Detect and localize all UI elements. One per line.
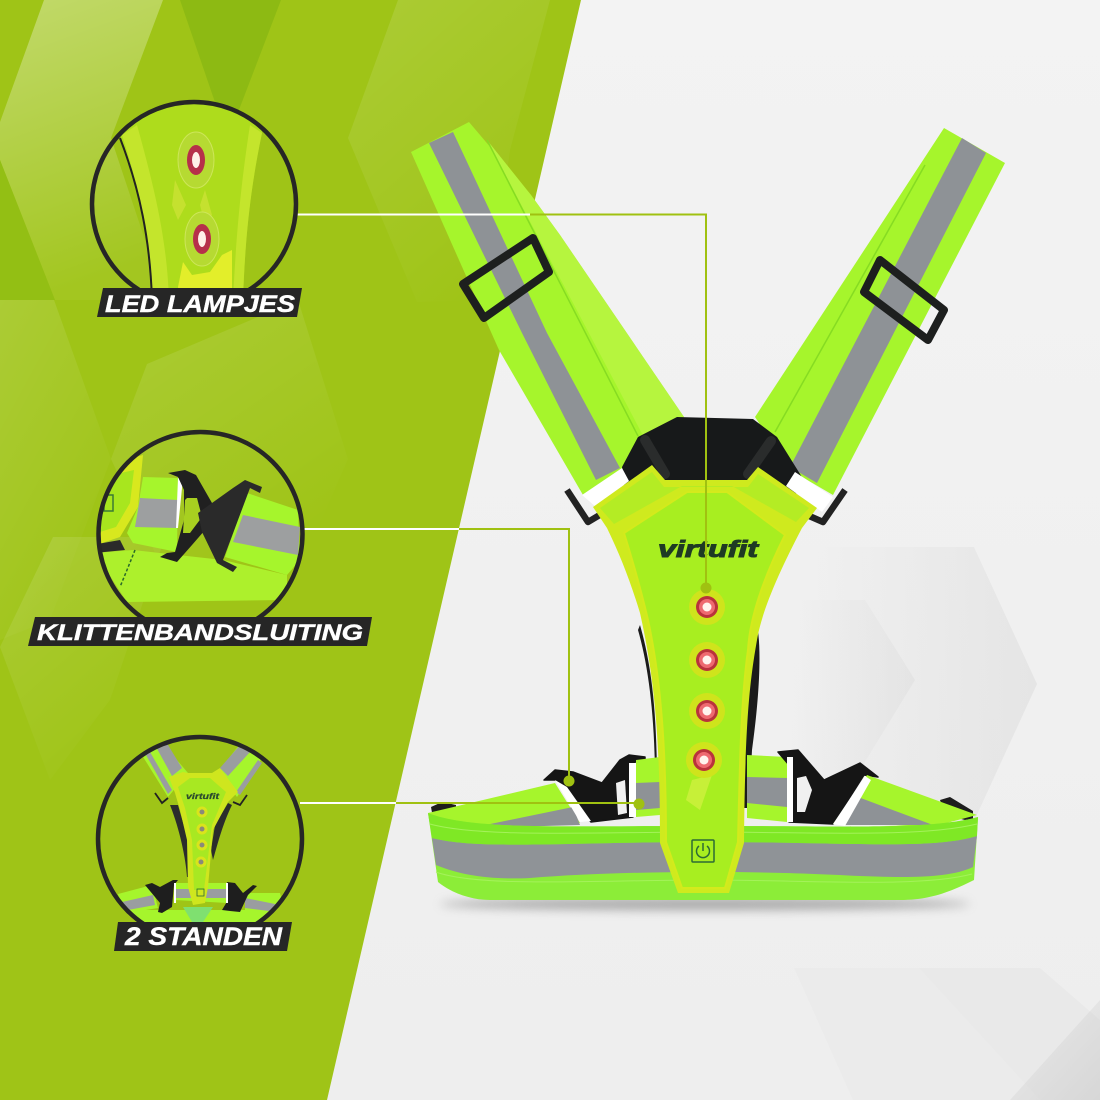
panel: klittenbandsluiting circle bbox=[90, 432, 302, 636]
panel: 2 standen circle bbox=[98, 737, 302, 941]
callout line: klittenbandsluiting bbox=[303, 529, 574, 786]
callout line: LED lampjes bbox=[297, 214, 712, 594]
vest product illustration bbox=[411, 122, 1005, 910]
mini vest panel: virtufit bbox=[186, 792, 219, 801]
mini vest straps bbox=[140, 740, 264, 877]
LED chest panel bbox=[593, 465, 817, 893]
soft shadow under belt bbox=[440, 898, 970, 910]
background: green diagonal panel bbox=[0, 0, 581, 1100]
front waist belt bbox=[428, 813, 978, 900]
left shoulder strap bbox=[411, 122, 684, 495]
label: 2 standen: 2 STANDEN bbox=[124, 923, 283, 951]
callout line: 2 standen bbox=[300, 798, 644, 810]
right strap buckle bbox=[864, 260, 944, 340]
back waist strap and clips bbox=[428, 625, 977, 830]
label: klittenbandsluiting: KLITTENBANDSLUITING bbox=[37, 620, 363, 645]
white webbing and D rings bbox=[567, 468, 845, 522]
black shoulder pad bbox=[622, 417, 805, 497]
left strap buckle bbox=[463, 238, 549, 318]
LED lights bbox=[686, 589, 725, 778]
logo: virtufit: virtufit bbox=[658, 536, 760, 562]
mini vest panel bbox=[169, 768, 238, 905]
label: klittenbandsluiting bbox=[28, 617, 372, 646]
panel: LED lampjes circle bbox=[92, 100, 296, 306]
icon: power button bbox=[692, 840, 714, 862]
mini vest belt and clips bbox=[118, 880, 281, 922]
right shoulder strap bbox=[755, 128, 1005, 495]
label: LED lampjes: LED LAMPJES bbox=[105, 291, 295, 318]
